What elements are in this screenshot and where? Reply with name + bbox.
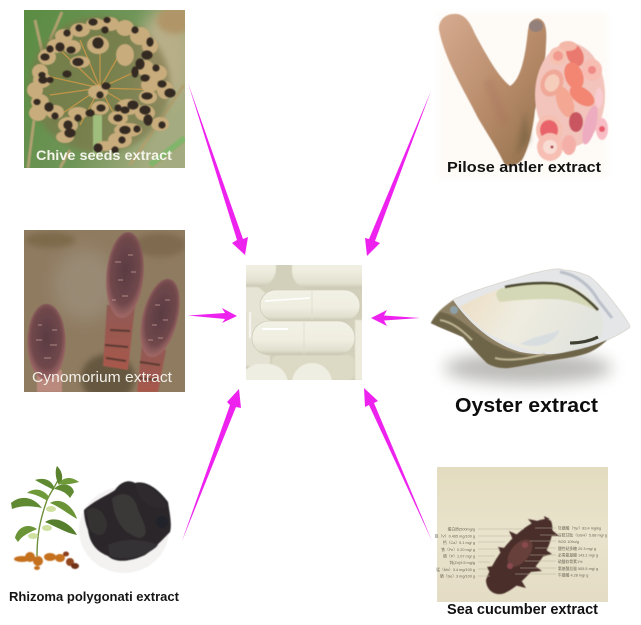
- panel: pilose antler: [438, 12, 608, 178]
- nutrient labels left: 磷（P）1.07 mg/ g: [443, 554, 475, 558]
- arrow: pilose antler to capsules: [365, 91, 431, 256]
- nutrient labels right: SOD 109u/g: [558, 540, 579, 544]
- photo: chive seed head: [24, 6, 193, 168]
- icon: background capsules: [246, 265, 362, 380]
- nutrient labels right: 必需氨基酸 143.1 mg/ g: [558, 552, 598, 558]
- label: sea cucumber extract: Sea cucumber extract: [447, 601, 598, 618]
- label: chive seeds extract: Chive seeds extract: [36, 147, 172, 163]
- label: cynomorium extract: Cynomorium extract: [32, 369, 173, 386]
- nutrient labels left: 硒（Se）3 mg/100 g: [440, 574, 475, 578]
- nutrient labels left: 锌(Zn)9.5 mg/g: [449, 560, 475, 565]
- nutrient labels right: 氨基酸总量 505.5 mg/ g: [558, 566, 598, 571]
- panel: oyster: [431, 269, 630, 417]
- icon: upper capsule: [260, 290, 360, 321]
- panel: sea cucumber: [435, 467, 608, 618]
- nutrient labels left: 铁（Fe）0.20 mg/ g: [441, 547, 475, 552]
- icon: lower capsule: [252, 321, 355, 355]
- nutrient labels right: 牛磺酸 4.28 mg/ g: [558, 572, 588, 578]
- panel: capsules: [246, 265, 362, 380]
- nutrient labels left: 钙（Ca）5.1 mg/ g: [443, 540, 475, 545]
- arrow: chive seeds to capsules: [188, 83, 248, 255]
- label: pilose antler extract: Pilose antler extract: [447, 160, 601, 176]
- nutrient labels left: [435, 526, 475, 578]
- nutrient labels right: 硫酸软骨素1%: [558, 559, 583, 564]
- nutrient labels left: 锰（Mn）3.4 mg/100 g: [436, 567, 475, 572]
- photo: bowl of rhizoma: [79, 481, 171, 573]
- nutrient labels left: 蛋白质(500mg/g: [448, 526, 475, 532]
- arrow: cynomorium to capsules: [188, 308, 237, 323]
- label: rhizoma polygonati extract: Rhizoma polygonati extract: [9, 589, 180, 604]
- arrow: oyster to capsules: [371, 310, 420, 326]
- nutrient labels right: [558, 526, 607, 578]
- panel: rhizoma polygonati: [9, 466, 180, 604]
- nutrient labels left: 钒（V）0.465 mg/100 g: [435, 534, 475, 538]
- illustration: polygonatum plant: [11, 466, 79, 570]
- photo: antler and slices: [438, 12, 608, 178]
- photo background: [437, 467, 608, 602]
- arrow: rhizoma polygonati to capsules: [182, 389, 241, 541]
- arrow: sea cucumber to capsules: [364, 388, 432, 541]
- nutrient labels right: 牡磺酸（Tyr）83.4 mg/kg: [558, 526, 601, 530]
- icon: sea cucumber body: [486, 516, 559, 594]
- nutrient labels right: 谷胱甘肽（GSH）5.68 mg/ g: [558, 532, 607, 538]
- photo: cynomorium stalks: [24, 230, 187, 402]
- panel: cynomorium: [24, 230, 187, 402]
- leader lines: [478, 528, 556, 576]
- label: oyster extract: Oyster extract: [455, 395, 598, 417]
- photo: oyster shell: [431, 269, 630, 384]
- nutrient labels right: 酸性粘多糖 20.3 mg/ g: [558, 546, 596, 551]
- panel: chive seeds: [24, 6, 193, 168]
